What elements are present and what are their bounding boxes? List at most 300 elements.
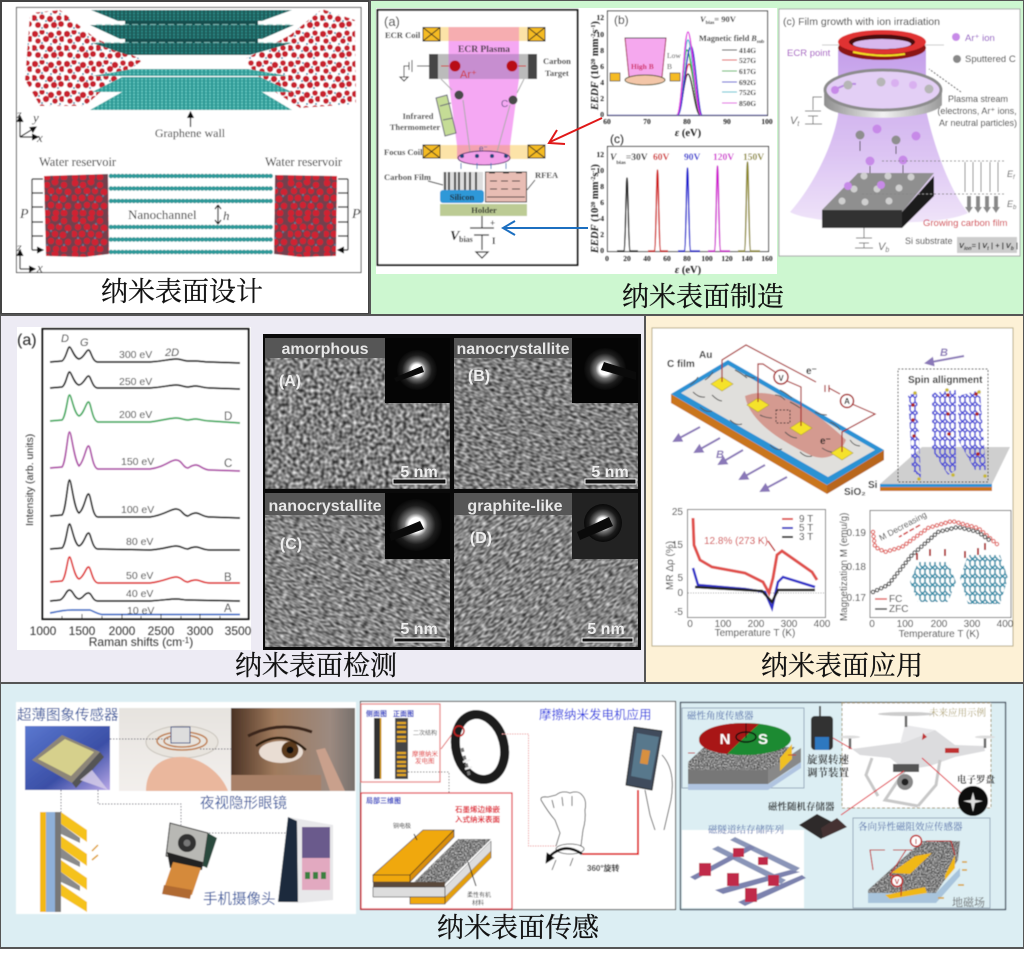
infrared thermometer: Infrared xyxy=(402,111,434,121)
chart (b): EEDF vs magnetic field: (b) xyxy=(614,13,629,27)
axes (b): 10 xyxy=(596,30,604,39)
spectra labels: 10 eV xyxy=(127,605,154,617)
ECR ring xyxy=(787,30,944,60)
legend (b): 850G xyxy=(739,99,756,108)
voltage labels (c) xyxy=(610,153,764,166)
Raman spectra chart: G xyxy=(80,337,89,349)
3D view inset: 材料 xyxy=(472,899,484,907)
legend and annotations xyxy=(905,33,1018,253)
anisotropic magnetoresistance sensor: 各向异性磁阻效应传感器 xyxy=(858,819,963,833)
Raman axes: 2000 xyxy=(109,624,136,638)
coil labels: Target xyxy=(545,68,569,78)
spectra labels: 100 eV xyxy=(121,504,154,516)
coil labels: Focus Coil xyxy=(384,147,423,157)
voltage labels (c): 60V xyxy=(653,153,670,163)
axes (b): 70 xyxy=(643,117,651,126)
nanochannel label: Nanochannel xyxy=(128,207,197,222)
water reservoir left: Water reservoir xyxy=(39,155,117,169)
legend (b): bias xyxy=(706,21,714,26)
axes (b): 20 xyxy=(591,59,597,65)
axes (c): ) xyxy=(590,164,601,168)
smartphone xyxy=(278,817,333,903)
axes (c): 12 xyxy=(596,150,604,159)
axes (c): 4 xyxy=(600,214,604,223)
magnetization chart: 200 xyxy=(931,619,948,630)
device labels: e⁻ xyxy=(820,436,831,447)
smartphone in hand xyxy=(626,727,672,830)
title: design: 纳米表面设计 xyxy=(101,270,263,309)
title: fabrication: 纳米表面制造 xyxy=(622,275,784,314)
axes zyx: y xyxy=(31,110,39,125)
legend and annotations: | xyxy=(1014,241,1018,250)
axes (c): 160 xyxy=(761,254,773,263)
Raman axes: ) xyxy=(189,635,193,649)
axes (b) xyxy=(590,13,773,139)
Raman axes: -1 xyxy=(182,636,190,645)
axes (b): 4 xyxy=(600,78,604,87)
magnetic tunnel junction array: 磁隧道结存储阵列 xyxy=(708,822,784,836)
schematic (a): ECR apparatus xyxy=(378,10,578,265)
panel: nanosurface fabrication xyxy=(370,0,1024,315)
TEM B: nanocrystallite: (B) xyxy=(468,368,490,385)
voltage labels (c): 120V xyxy=(713,153,734,163)
hand with wristband xyxy=(541,792,586,870)
sensing group one: image sensor and lens xyxy=(16,702,356,914)
spectra labels: 50 eV xyxy=(126,570,153,582)
axes (c): 80 xyxy=(683,254,691,263)
TEM B: nanocrystallite: nanocrystallite xyxy=(457,341,570,358)
axes (c): 8 xyxy=(600,182,604,191)
magnetization chart: Magnetization M (emu/g) xyxy=(839,513,850,621)
device labels: e⁻ xyxy=(806,366,817,377)
infrared thermometer: Thermometer xyxy=(390,122,440,132)
anisotropic magnetoresistance sensor: 地磁场 xyxy=(952,894,985,910)
inset plasma (b): High B xyxy=(631,62,654,71)
water reservoir left xyxy=(19,155,117,257)
TEM A: amorphous xyxy=(265,338,450,489)
device labels: C film xyxy=(667,359,695,370)
MRAM chips: 磁性随机存储器 xyxy=(768,799,835,813)
side and front view inset: 发电图 xyxy=(415,756,434,765)
side and front view inset: 摩擦纳米 xyxy=(412,749,438,758)
TEM B: nanocrystallite xyxy=(454,338,638,489)
axes (b): 60 xyxy=(603,117,611,126)
legend and annotations: Ar⁺ ion xyxy=(965,33,995,44)
spin alignment inset: Spin allignment xyxy=(908,375,983,386)
spectra labels: 80 eV xyxy=(126,536,153,548)
3D view inset: 石墨烯边缘嵌 xyxy=(455,804,500,814)
dotted connectors xyxy=(61,739,287,833)
drone photo xyxy=(840,703,996,816)
MR chart: 5 xyxy=(677,573,683,584)
application figure: B xyxy=(940,347,948,359)
legend (b): 752G xyxy=(739,88,756,97)
legend and annotations: ion xyxy=(964,246,972,252)
field arrows: E xyxy=(1007,199,1013,209)
nanochannel label: h xyxy=(223,208,230,223)
TEM A: amorphous: 5 nm xyxy=(400,464,438,481)
photo: contact lens on finger xyxy=(119,708,231,791)
Raman axes: 2500 xyxy=(148,624,175,638)
device labels: Au xyxy=(699,350,712,361)
MR chart: 400 xyxy=(814,619,831,630)
arrow: red from chart b to schematic xyxy=(549,118,602,144)
speed motor xyxy=(807,706,852,780)
water reservoir left: P xyxy=(19,207,29,222)
substrate stack: Silicon xyxy=(450,192,475,202)
MR chart: 3 T xyxy=(799,532,813,543)
EEDF curves (b) xyxy=(608,32,767,115)
figure: film growth with ion irradiation xyxy=(779,9,1020,256)
legend (b): = 90V xyxy=(714,14,737,24)
MR chart: 100 xyxy=(715,619,732,630)
photo: eye xyxy=(231,708,355,791)
legend (b): 414G xyxy=(739,46,756,55)
magnetization chart: FC xyxy=(889,594,902,605)
chart (c): EEDF vs bias voltage: (c) xyxy=(610,132,624,146)
magnetization chart xyxy=(839,509,1014,640)
side and front view inset xyxy=(361,704,453,782)
title: triboelectric: 摩擦纳米发电机应用 xyxy=(539,707,652,722)
TEM A: amorphous: amorphous xyxy=(281,341,369,358)
magnetic angle sensor: 磁性角度传感器 xyxy=(687,708,754,722)
Raman axes: Intensity (arb. units) xyxy=(24,434,36,526)
axes (c): s xyxy=(590,173,601,177)
Ar+ ions xyxy=(441,60,526,81)
coil labels: ECR Coil xyxy=(385,30,421,40)
axes (b): 2 xyxy=(600,94,604,103)
device labels: A xyxy=(844,397,850,406)
upper graphene walls xyxy=(90,10,294,55)
3D view inset: 柔性有机 xyxy=(467,891,491,899)
Raman spectra chart xyxy=(17,329,252,649)
MR chart: 12.8% (273 K) xyxy=(704,536,768,547)
infrared thermometer xyxy=(390,95,456,136)
legend (b): Magnetic field B xyxy=(699,34,757,43)
MR chart xyxy=(665,507,831,639)
bias supply: V xyxy=(450,229,461,244)
legend and annotations: | + | V xyxy=(989,241,1012,250)
axes (c): 120 xyxy=(721,254,733,263)
axes (c): 100 xyxy=(701,254,713,263)
device labels xyxy=(667,350,878,498)
magnetization chart: 400 xyxy=(997,619,1014,630)
axes (c): -1 xyxy=(591,168,597,173)
spin alignment inset xyxy=(880,369,1010,491)
TEM image grid xyxy=(263,334,641,650)
magnetic field arrows xyxy=(674,356,964,491)
speed motor: 旋翼转速 xyxy=(807,752,849,767)
axes zx: x xyxy=(36,260,43,275)
axes (c): 40 xyxy=(643,254,651,263)
spectra labels: 250 eV xyxy=(119,376,152,388)
TEM D: graphite-like: (D) xyxy=(470,530,492,547)
device labels: SiO₂ xyxy=(844,487,866,498)
magnetization chart: 0.17 xyxy=(847,593,866,604)
magnetic angle sensor: N xyxy=(720,731,730,748)
bias supply: + xyxy=(490,218,495,228)
plasma column xyxy=(438,27,528,159)
anisotropic magnetoresistance sensor: I xyxy=(915,839,917,846)
axes (b): ε (eV) xyxy=(675,128,702,139)
TEM D: graphite-like: 5 nm xyxy=(587,621,625,638)
anisotropic magnetoresistance sensor: V xyxy=(895,879,900,886)
legend and annotations: Growing carbon film xyxy=(923,218,1008,229)
axes (c): ε (eV) xyxy=(675,265,702,276)
legend (b): 692G xyxy=(739,78,756,87)
sputtered carbon xyxy=(441,79,524,152)
sensor labels: 超薄图象传感器 xyxy=(17,707,119,724)
plot backdrop xyxy=(376,8,777,274)
coil labels xyxy=(384,30,571,190)
MR chart: 0 xyxy=(677,588,683,599)
axes (c): 0 xyxy=(600,246,604,255)
axes (c): EEDF (10 xyxy=(590,208,601,253)
spectra labels: A xyxy=(224,603,232,615)
axes (c): 0 xyxy=(605,254,609,263)
MR chart: 25 xyxy=(672,507,683,518)
voltage labels (c): V xyxy=(610,153,617,163)
layered comb sensor xyxy=(40,812,98,912)
magnetization chart: 0.19 xyxy=(847,528,866,539)
title: application: 纳米表面应用 xyxy=(761,644,923,683)
MR chart: 300 xyxy=(781,619,798,630)
coil labels: Carbon xyxy=(543,56,571,66)
bias supply: I xyxy=(492,236,496,246)
camera module xyxy=(162,823,217,899)
panel: nanosurface application xyxy=(645,315,1024,683)
molecular simulation figure xyxy=(16,8,361,275)
axes zx: z xyxy=(16,240,22,254)
drone photo: 电子罗盘 xyxy=(957,772,996,786)
plasma column: ECR Plasma xyxy=(458,45,510,55)
title: characterization: 纳米表面检测 xyxy=(235,644,397,683)
legend (b) xyxy=(699,14,764,108)
axes zyx: x xyxy=(36,130,43,145)
magnetization chart: 300 xyxy=(964,619,981,630)
chart (b): EEDF vs magnetic field xyxy=(590,11,773,139)
side and front view inset: 侧面图 xyxy=(366,709,387,718)
3D view inset: 入式纳米表面 xyxy=(455,814,500,824)
axes zyx xyxy=(16,107,43,145)
sensor labels xyxy=(17,707,287,908)
field arrows: f xyxy=(1013,175,1016,181)
legend and annotations: (electrons, Ar⁺ ions, xyxy=(937,106,1017,116)
device labels: Si xyxy=(868,480,878,491)
sensor labels: 手机摄像头 xyxy=(203,891,276,908)
axes (c): 2 xyxy=(600,230,604,239)
MR chart: 5 T xyxy=(799,523,813,534)
water molecules left of channel xyxy=(25,10,143,106)
TEM C: nanocrystallite: (C) xyxy=(280,536,302,553)
axes (b): 6 xyxy=(600,62,604,71)
arrow: blue from chart c to bias xyxy=(503,221,588,235)
application figure xyxy=(652,328,1014,646)
panel: nanosurface sensing xyxy=(0,683,1024,948)
axes zx xyxy=(16,240,43,275)
gold contacts xyxy=(711,377,853,460)
axes (b): -1 xyxy=(591,25,597,30)
legend and annotations: Sputtered C xyxy=(965,54,1016,65)
TEM A: amorphous: (A) xyxy=(279,373,301,390)
magnetic angle sensor: S xyxy=(758,731,768,748)
substrate stack: Holder xyxy=(471,205,497,215)
substrate xyxy=(822,172,934,228)
ECR coils xyxy=(423,28,545,158)
bias supply xyxy=(450,216,496,258)
MR chart: 9 T xyxy=(799,514,813,525)
magnetic tunnel junction array xyxy=(682,822,806,908)
sensor labels: 夜视隐形眼镜 xyxy=(200,794,287,812)
spectra labels: C xyxy=(224,458,232,470)
axes (c): 20 xyxy=(591,202,597,208)
Raman spectra chart: (a) xyxy=(17,332,37,349)
sensing group two: triboelectric nanogenerator xyxy=(360,702,676,910)
field arrows: E xyxy=(1007,169,1013,179)
legend and annotations: Si substrate xyxy=(905,236,953,246)
MR chart: MR Δρ (%) xyxy=(665,541,676,590)
magnetization chart: 0.18 xyxy=(847,562,866,573)
chart (c): EEDF vs bias voltage xyxy=(590,132,773,276)
sensing group three: magnetic sensors xyxy=(680,702,1006,910)
Raman axes: 3000 xyxy=(187,624,214,638)
axes (b): 80 xyxy=(683,117,691,126)
lower graphene walls xyxy=(90,69,292,110)
field arrows: b xyxy=(1013,205,1017,211)
side and front view inset: 正面图 xyxy=(393,710,414,718)
axes (b): 90 xyxy=(723,117,731,126)
device labels: V xyxy=(778,374,784,383)
coil labels: Carbon Film xyxy=(384,172,431,182)
magnetization chart: 0 xyxy=(869,619,875,630)
MR chart: -5 xyxy=(674,607,683,618)
spectra labels xyxy=(119,349,232,617)
water reservoir right xyxy=(265,155,361,257)
spectra labels: 200 eV xyxy=(119,409,152,421)
legend and annotations: t xyxy=(987,246,989,252)
spectra labels: 150 eV xyxy=(121,456,154,468)
magnetization chart: 100 xyxy=(897,619,914,630)
axes (c): 10 xyxy=(596,166,604,175)
legend and annotations: b xyxy=(1011,246,1014,252)
magnetization chart: ZFC xyxy=(889,604,908,615)
MR chart: 0 xyxy=(687,619,693,630)
TEM C: nanocrystallite: nanocrystallite xyxy=(269,498,382,515)
legend and annotations: V xyxy=(959,241,964,250)
side and front view inset: 二次结构 xyxy=(413,729,437,737)
spectra labels: D xyxy=(224,411,232,423)
inset plasma (b) xyxy=(610,38,681,85)
MR chart: Temperature T (K) xyxy=(715,628,795,639)
magnetization chart: Temperature T (K) xyxy=(899,629,979,640)
anisotropic magnetoresistance sensor xyxy=(853,818,990,910)
axes (b): mm xyxy=(590,38,601,59)
magnetization chart: M Decreasing xyxy=(877,509,928,543)
wristband xyxy=(449,709,511,785)
axes (b): 100 xyxy=(761,117,773,126)
voltage labels (c): =30V xyxy=(626,153,648,163)
legend and annotations: = | V xyxy=(972,241,988,250)
axes (c) xyxy=(590,150,773,276)
legend and annotations: Plasma stream xyxy=(948,94,1008,104)
rotation label: 360°旋转 xyxy=(587,863,620,873)
voltage labels (c): 90V xyxy=(684,153,700,163)
speed motor: 调节装置 xyxy=(807,765,849,780)
figure: film growth with ion irradiation: (c) Film growth with ion irradiation xyxy=(783,16,940,28)
3D view inset xyxy=(361,793,512,909)
substrate stack xyxy=(440,172,527,216)
water reservoir right: P xyxy=(351,207,361,222)
TEM C: nanocrystallite: 5 nm xyxy=(400,621,438,638)
carbon targets xyxy=(400,54,537,81)
spectra curves xyxy=(50,347,240,614)
legend (b): sub xyxy=(757,40,764,45)
axes (c): mm xyxy=(590,181,601,202)
bias supply: bias xyxy=(459,235,473,244)
MRAM chips xyxy=(768,771,904,839)
schematic (a): ECR apparatus: (a) xyxy=(384,14,400,29)
TEM B: nanocrystallite: 5 nm xyxy=(591,464,629,481)
3D view inset: 铜电极 xyxy=(393,822,411,830)
axes (b): -2 xyxy=(591,34,597,39)
axes (c): 140 xyxy=(741,254,753,263)
axes (b): EEDF (10 xyxy=(590,65,601,110)
plasma cone xyxy=(790,50,968,223)
title: sensing: 纳米表面传感 xyxy=(437,906,599,945)
spectra labels: 300 eV xyxy=(119,349,152,361)
bias symbols: V xyxy=(790,115,797,127)
Raman axes xyxy=(24,434,252,649)
bias symbols: V xyxy=(878,241,885,253)
graphene flakes xyxy=(910,562,956,602)
Raman axes: Raman shifts (cm xyxy=(89,635,182,649)
photo: image sensor chip xyxy=(25,726,110,790)
axes (b): 8 xyxy=(600,46,604,55)
legend (b): V xyxy=(700,14,707,24)
water molecules right of channel xyxy=(243,9,356,108)
nanochannel label xyxy=(128,205,230,224)
TEM D: graphite-like: graphite-like xyxy=(467,498,563,515)
water reservoir right: Water reservoir xyxy=(265,155,343,169)
Raman spectra chart: 2D xyxy=(164,347,179,359)
axes (b): 0 xyxy=(600,110,604,119)
spectra labels: 40 eV xyxy=(126,588,153,600)
axes zyx: z xyxy=(16,107,22,121)
TEM D: graphite-like xyxy=(454,493,638,647)
graphene wall label: Graphene wall xyxy=(155,126,226,140)
3D view inset: 局部三维图 xyxy=(366,796,401,805)
inset plasma (b): Low xyxy=(667,51,681,60)
field arrows xyxy=(862,161,1017,213)
graphene wall label xyxy=(155,112,226,140)
legend (b): 527G xyxy=(739,56,756,65)
TEM C: nanocrystallite xyxy=(265,493,450,647)
voltage labels (c): 150V xyxy=(743,153,764,163)
legend and annotations: Ar neutral particles) xyxy=(939,118,1017,128)
grey plasma ring xyxy=(824,70,942,118)
axes (b): s xyxy=(590,30,601,34)
drone photo: 未来应用示例 xyxy=(929,705,986,719)
device slab xyxy=(671,360,884,494)
axes (b): ) xyxy=(590,21,601,25)
Raman spectra chart: D xyxy=(61,333,69,345)
MR chart: 200 xyxy=(748,619,765,630)
axes (c): -2 xyxy=(591,177,597,182)
Raman axes: 1500 xyxy=(69,624,96,638)
magnetic angle sensor xyxy=(682,708,804,790)
EEDF peaks (c) xyxy=(617,162,760,251)
panel: nanosurface characterization xyxy=(0,314,644,682)
